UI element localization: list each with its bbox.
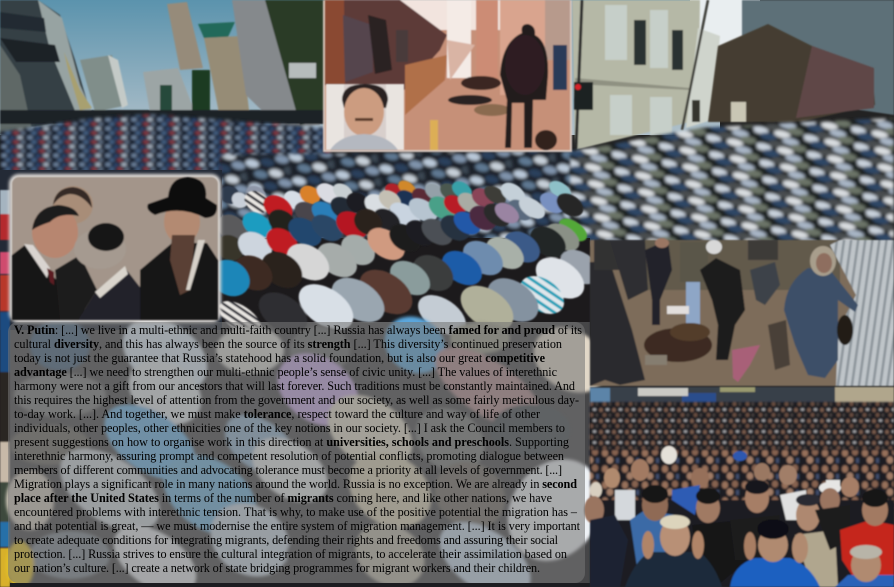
panel background xyxy=(8,322,585,583)
speech text: to-day work. [...]. And together, we must make tolerance, respect toward the culture and way of life of other xyxy=(14,407,540,421)
speech text: harmony were not a gift from our ancestors that will last forever. Such traditions must be constantly maintained. And xyxy=(14,379,575,393)
distant crowd xyxy=(590,402,894,462)
speech text: protection. [...] Russia strives to ensure the cultural integration of migrants, to accelerate their assimilation based on xyxy=(14,547,567,561)
Putin xyxy=(12,245,95,320)
older man with kippah xyxy=(78,268,156,320)
speech text: place after the United States in terms of the number of migrants coming here, and like other nations, we have xyxy=(14,491,552,505)
brown brick building xyxy=(708,24,875,122)
front row men xyxy=(625,552,722,587)
worshippers, row 4 xyxy=(217,177,574,214)
buildings on left side of street xyxy=(0,0,330,135)
man at rear xyxy=(53,186,93,224)
sack xyxy=(768,320,790,370)
speech text: members of different communities and advocating tolerance must become a priority at all levels of government. [...] xyxy=(14,463,562,477)
speech text: and that potential is great, — we must modernise the entire system of migration management. [...] It is very important xyxy=(14,519,581,533)
casualties on floor xyxy=(461,76,501,90)
worshippers, row 3 xyxy=(240,178,588,236)
pale sky at right xyxy=(690,0,760,60)
worshippers, near rows xyxy=(203,214,606,343)
corrugated fence xyxy=(830,240,894,386)
grey high-rise top right xyxy=(742,0,894,115)
speech text: V. Putin: [...] we live in a multi-ethnic and multi-faith country [...] Russia has always been famed for and proud of its xyxy=(14,323,582,337)
speech text: our nation’s culture. [...] create a network of state bridging programmes for migrant workers and their children. xyxy=(14,561,540,575)
speech text: advantage [...] we need to strengthen our multi-ethnic people’s sense of civic unity. [...] The values of interethnic xyxy=(14,365,558,379)
speech text: today is not just the guarantee that Russia’s statehood has a solid foundation, but is also our great competitive xyxy=(14,351,546,365)
blood on snow xyxy=(732,345,760,382)
diagonal rows right xyxy=(570,118,894,245)
translucent text panel xyxy=(8,322,585,583)
left edge colour strip xyxy=(0,190,10,587)
platform and walls xyxy=(325,0,570,150)
speech text: individuals, other peoples, other ethnicities one of the key notions in our society. [...] I ask the Council members to xyxy=(14,421,565,435)
middle crowd xyxy=(590,450,894,510)
rabbi xyxy=(140,243,218,320)
base under foreground xyxy=(0,238,590,587)
metro carriage xyxy=(325,0,447,90)
speech text: cultural diversity, and this has always been the source of its strength [...] This diversity’s continued preservation xyxy=(14,337,562,351)
sky xyxy=(0,0,720,135)
muddy ground xyxy=(590,240,894,386)
inset photo: sacrifice in the mud xyxy=(590,238,894,386)
speech text: present suggestions on how to organise work in this direction at universities, schools and preschools. Supporting xyxy=(14,435,569,449)
dark strip below panel xyxy=(10,583,590,587)
elderly woman in blue coat xyxy=(784,268,858,378)
speech text: this requires the highest level of attention from the government and our society, as well as some fairly meticulous day- xyxy=(14,393,579,407)
speech text: Migration plays a significant role in many nations around the world. Russia is no exception. We are already in second xyxy=(14,477,577,491)
inset portrait of suspect xyxy=(326,84,404,150)
person from behind xyxy=(500,24,548,148)
speech text xyxy=(14,323,582,575)
far crowd xyxy=(0,114,330,240)
worshippers, row 2 xyxy=(211,198,523,271)
inset photo: Putin with rabbis xyxy=(9,174,221,323)
speech text: interethnic harmony, assuring prompt and competent resolution of potential conflicts, promoting dialogue between xyxy=(14,449,564,463)
middle crowd xyxy=(220,150,600,240)
speech text: to create adequate conditions for integrating migrants, defending their rights and freedoms and assuring their social xyxy=(14,533,559,547)
slaughtered animal xyxy=(644,328,712,362)
man in leather jacket left xyxy=(590,262,645,386)
right cream building xyxy=(572,0,720,150)
worshippers beneath text panel xyxy=(6,303,621,587)
inset photo: migrants at prayer xyxy=(584,387,894,587)
background buildings xyxy=(590,387,894,417)
speech text: encountered problems with interethnic tension. That is why, to make use of the positive potential the migration has – xyxy=(14,505,578,519)
mid people xyxy=(661,446,677,464)
near people xyxy=(590,482,602,498)
soft edge xyxy=(323,0,572,152)
standing men xyxy=(645,240,672,325)
inset photo: subway station aftermath xyxy=(323,0,572,152)
wall xyxy=(12,177,218,320)
